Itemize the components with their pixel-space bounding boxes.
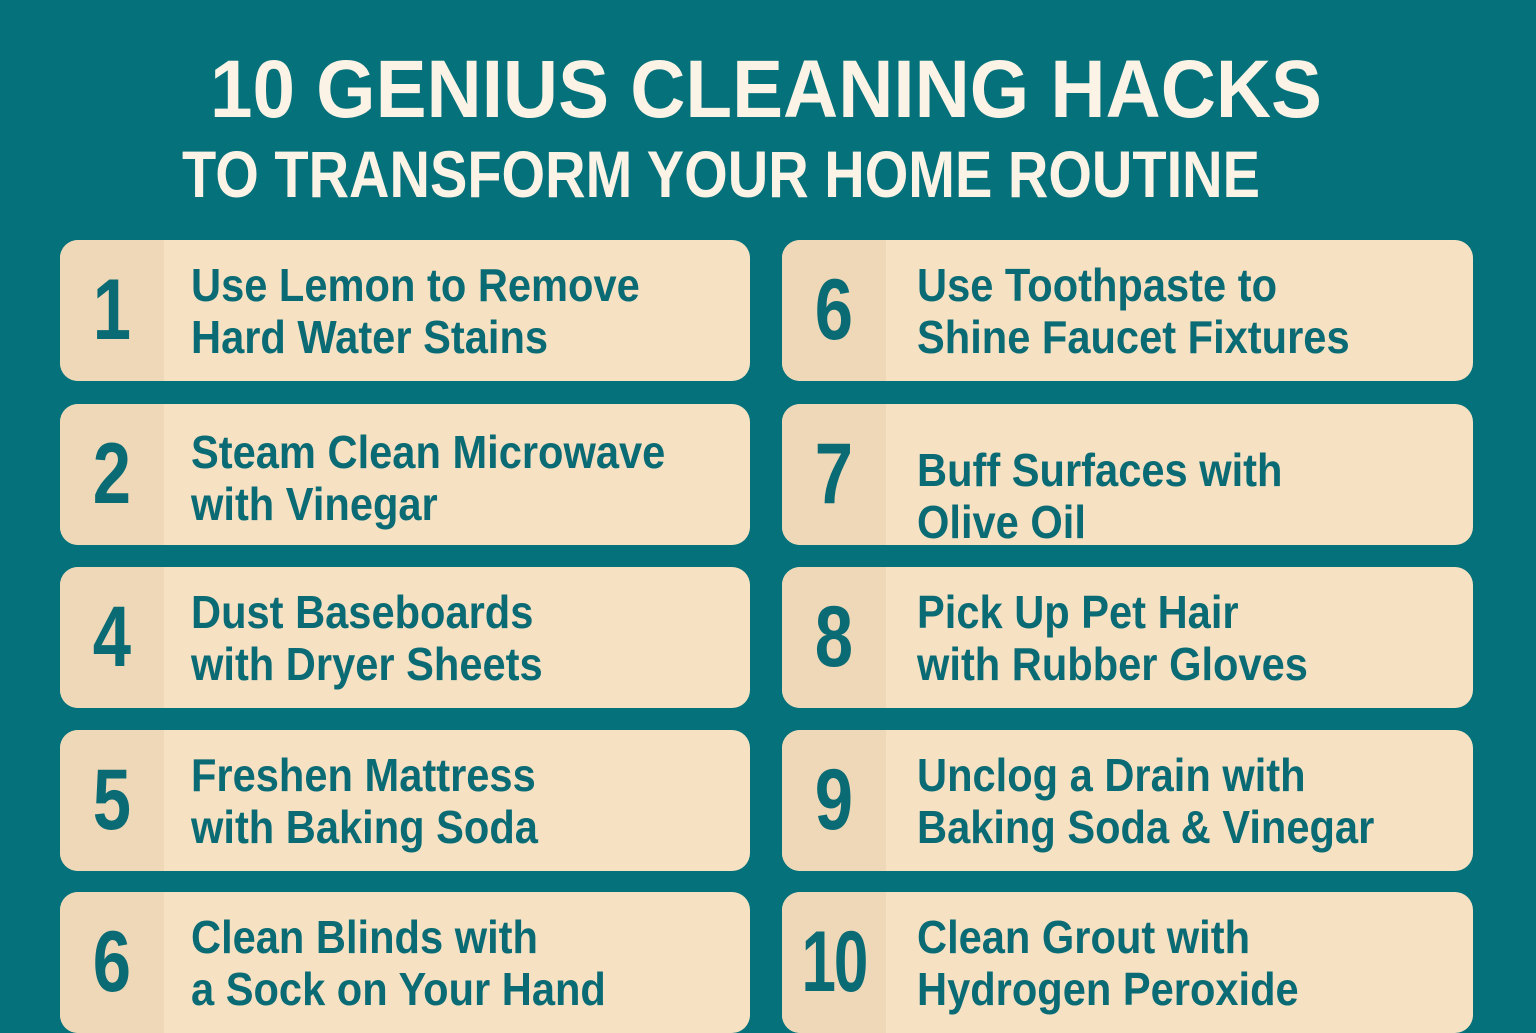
card 6 right: Shine Faucet Fixtures [917,310,1350,362]
card 9: Baking Soda & Vinegar [917,800,1374,852]
card 5: Freshen Mattress [191,748,536,800]
card 4: Dust Baseboards [191,586,533,638]
card 10: 10 [802,914,866,1010]
card 1: Use Lemon to Remove [191,258,640,310]
card 9: 9 [815,752,853,848]
card 2: 2 [93,426,131,522]
card 8 [782,567,1473,708]
card 6 left [60,892,750,1033]
card 5: with Baking Soda [191,800,538,852]
card 2: with Vinegar [191,478,438,530]
card 1 [60,240,750,381]
card 4: 4 [93,589,131,685]
card 4 [60,567,750,708]
card 1: 1 [93,262,131,358]
card 5 [60,730,750,871]
card 8: Pick Up Pet Hair [917,586,1239,638]
card 9: Unclog a Drain with [917,748,1306,800]
card 2 [60,404,750,545]
card 1: Hard Water Stains [191,310,548,362]
card 10: Hydrogen Peroxide [917,962,1299,1014]
card 6 left: Clean Blinds with [191,910,538,962]
card 9 [782,730,1473,871]
title: 10 GENIUS CLEANING HACKS [210,44,1322,135]
card 5: 5 [93,752,131,848]
card 7: Buff Surfaces with [917,444,1282,496]
card 4: with Dryer Sheets [191,638,543,690]
card 10 [782,892,1473,1033]
card 10: Clean Grout with [917,910,1250,962]
card 6 left: a Sock on Your Hand [191,962,606,1014]
card 2: Steam Clean Microwave [191,426,665,478]
card 7: 7 [815,426,853,522]
card 7 [782,404,1473,545]
card 8: with Rubber Gloves [917,638,1308,690]
card 6 left: 6 [93,914,131,1010]
card 8: 8 [815,589,853,685]
card 6 right: Use Toothpaste to [917,258,1277,310]
title: TO TRANSFORM YOUR HOME ROUTINE [182,137,1260,210]
card 6 right: 6 [815,262,853,358]
title [182,44,1322,210]
card 6 right [782,240,1473,381]
